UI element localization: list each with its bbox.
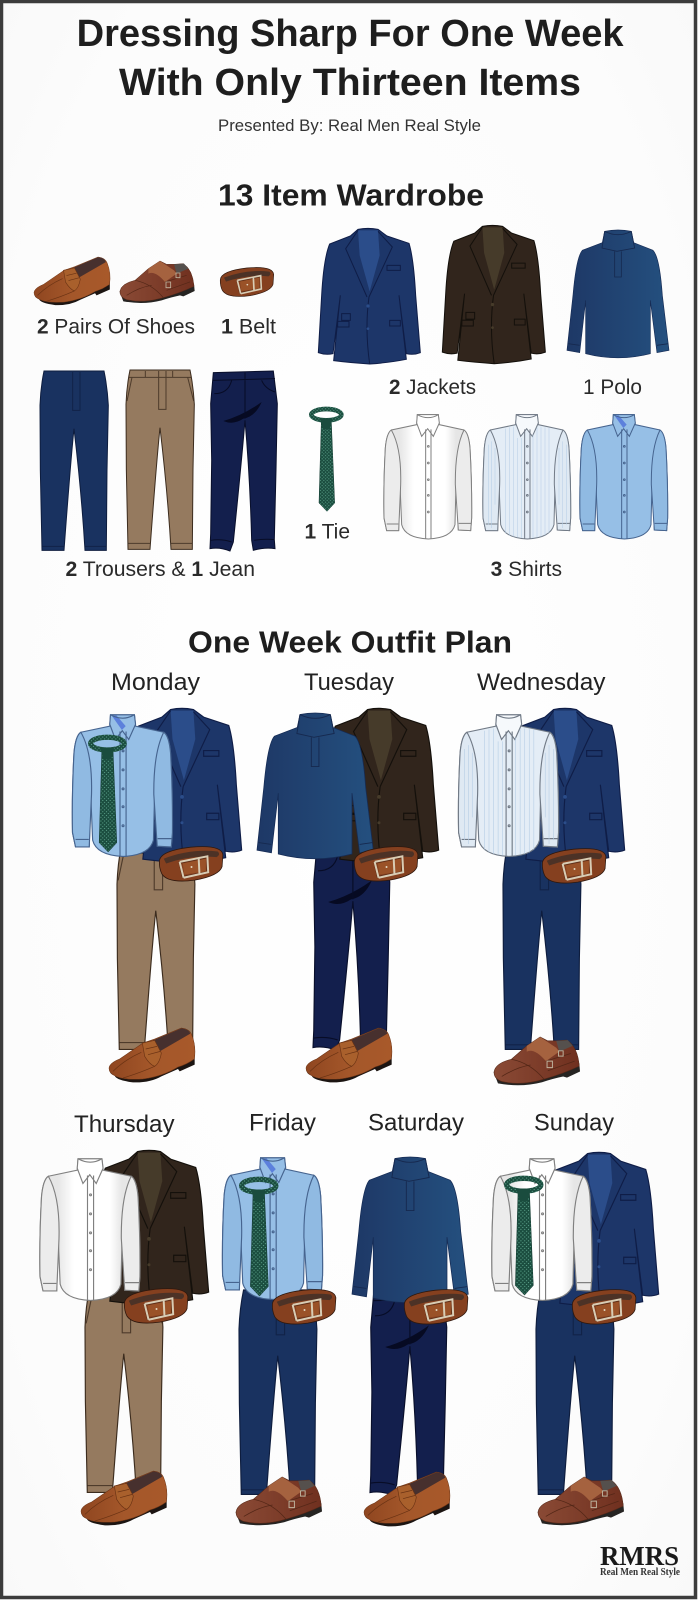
belt [542,849,606,883]
icon: loafers [34,257,110,305]
jacket [508,708,625,863]
icon: white shirt [384,415,472,539]
jacket [92,1150,209,1305]
trousers [536,1290,614,1494]
title: Dressing Sharp For One Week [77,13,624,55]
icon: navy jacket [318,228,420,364]
shoes [81,1471,167,1525]
shoes [364,1472,450,1526]
panel: Wednesday outfit [458,669,625,1085]
title: With Only Thirteen Items [119,62,581,104]
heading: one week outfit plan: One Week Outfit Plan [188,625,512,660]
label: Saturday: Saturday [368,1110,464,1137]
tie [242,1179,276,1296]
icon: blue shirt [580,415,668,539]
trousers [117,845,195,1049]
panel: Monday outfit [72,669,242,1082]
subtitle: Presented By: Real Men Real Style [218,117,481,135]
panel: Friday outfit [222,1110,336,1525]
shirt [72,715,172,856]
label: shoes: 2 Pairs Of Shoes [37,316,195,339]
jeans [313,845,390,1050]
logo: RMRS: RMRS [600,1541,679,1571]
jeans [370,1290,447,1495]
polo [257,713,373,859]
panel: Sunday outfit [492,1110,659,1525]
heading: 13 item wardrobe: 13 Item Wardrobe [218,178,484,212]
label: Tuesday: Tuesday [304,669,394,696]
jacket [542,1152,659,1307]
belt [404,1290,468,1324]
label: jackets: 2 Jackets [389,376,476,399]
shirt [492,1159,592,1300]
label: Wednesday: Wednesday [477,669,606,696]
shoes [537,1477,624,1525]
logo: RMRS: Real Men Real Style [600,1567,680,1578]
icon: brown jacket [442,225,545,364]
label: shirts: 3 Shirts [491,558,562,581]
shirt [40,1159,140,1300]
icon: navy trousers [40,371,108,550]
shirt [222,1158,323,1299]
icon: belt [220,268,274,296]
label: tie: 1 Tie [304,520,350,544]
label: Sunday: Sunday [534,1110,614,1137]
belt [159,847,223,881]
shoes [109,1028,195,1082]
tie [91,737,124,852]
belt [572,1290,636,1324]
jacket [125,708,242,863]
jacket [322,708,439,863]
icon: jeans [210,371,277,551]
label: trousers and jean: 2 Trousers & 1 Jean [66,558,255,581]
polo [352,1157,468,1303]
icon: striped shirt [483,415,571,539]
title [77,13,624,104]
icon: khaki trousers [126,370,194,549]
panel: Tuesday outfit [257,669,439,1082]
panel: Thursday outfit [40,1111,209,1525]
label: Friday: Friday [249,1110,316,1137]
label: Monday: Monday [111,669,200,696]
belt [272,1290,336,1324]
panel: Saturday outfit [352,1110,468,1526]
label: polo: 1 Polo [583,376,642,399]
shoes [493,1037,580,1085]
belt [354,847,418,881]
shoes [306,1028,392,1082]
trousers [239,1290,317,1494]
panel: wardrobe items [34,225,669,581]
icon: polo [567,230,669,358]
shirt [458,715,559,856]
icon: tie [311,409,341,511]
belt [124,1289,188,1323]
trousers [503,845,581,1049]
shoes [235,1477,322,1525]
trousers [85,1288,163,1492]
label: Thursday: Thursday [74,1111,174,1138]
tie [507,1178,541,1295]
label: belt: 1 Belt [221,316,276,339]
icon: monk strap shoes [119,261,195,303]
